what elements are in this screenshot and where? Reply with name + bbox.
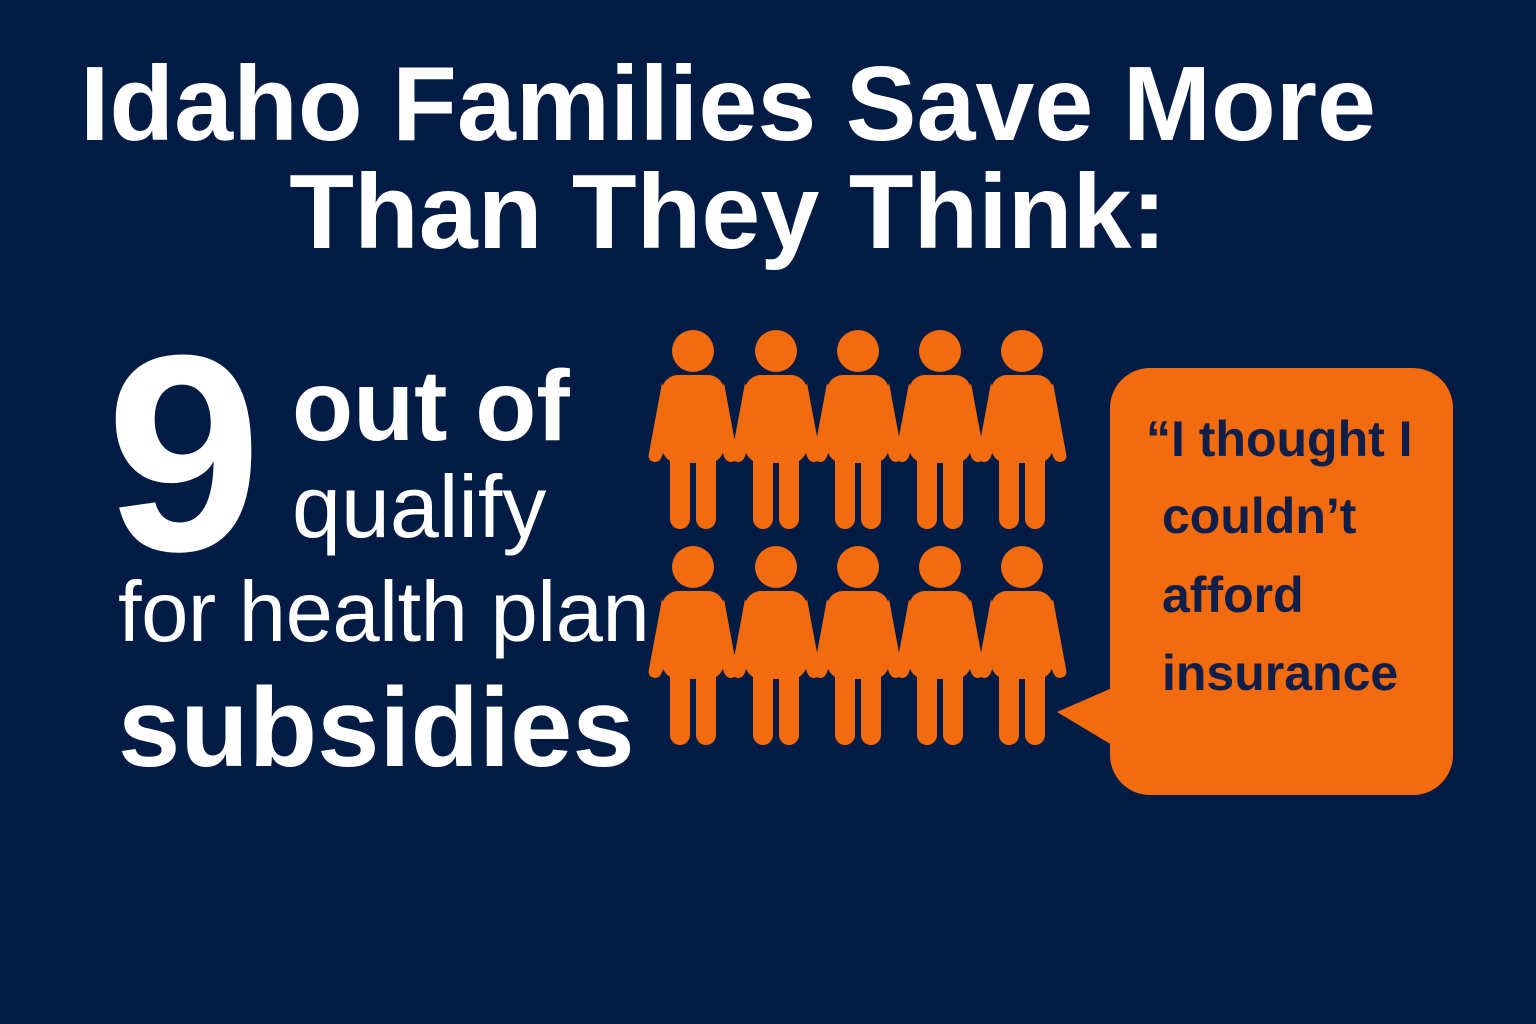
quote text: afford [1162, 567, 1304, 623]
speech bubble [1057, 368, 1453, 795]
quote text: “I thought I [1146, 411, 1413, 467]
text: qualify: qualify [292, 457, 546, 556]
row 1 people [649, 330, 1066, 529]
text: for health plan: for health plan [118, 565, 649, 660]
text: subsidies: subsidies [118, 665, 635, 790]
row 2 people [649, 546, 1066, 745]
big number 9: 9 [106, 298, 258, 610]
quote text: insurance [1162, 645, 1398, 701]
title: Idaho Families Save More [80, 45, 1376, 163]
title [80, 45, 1376, 271]
quote text: couldn’t [1162, 488, 1357, 544]
stat text block [106, 298, 649, 790]
text: out of: out of [292, 350, 570, 462]
title: Than They Think: [289, 153, 1167, 271]
